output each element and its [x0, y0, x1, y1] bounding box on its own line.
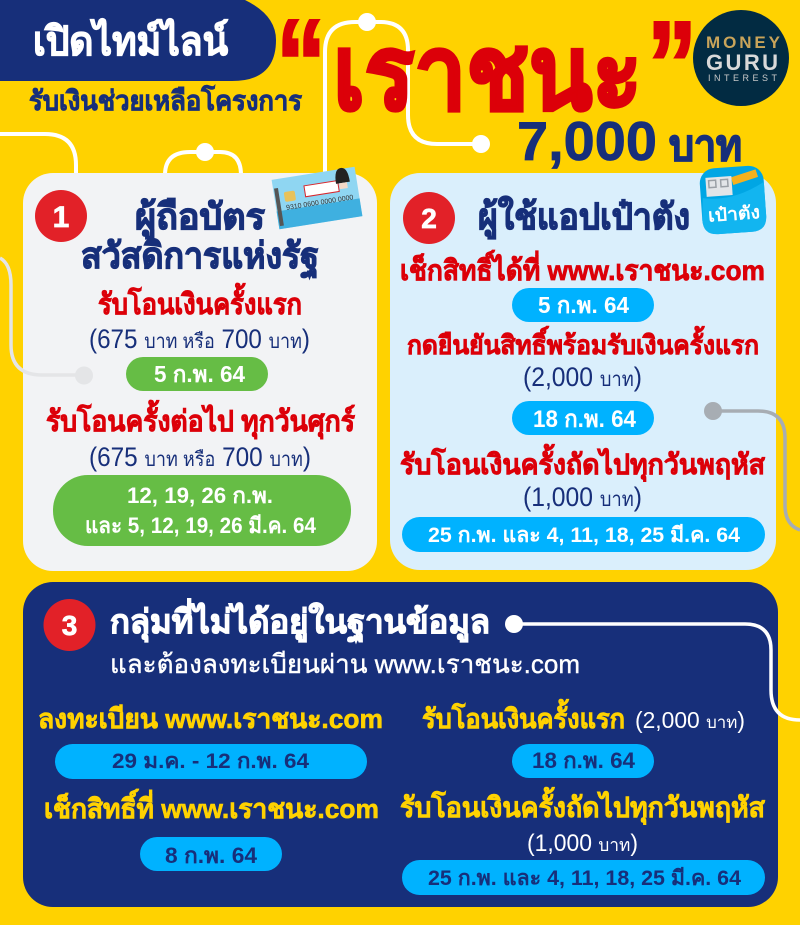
blue pill: check date: 5 ก.พ. 64 [538, 292, 629, 318]
panel: group 1 [23, 173, 377, 571]
main title: เราชนะ [333, 16, 642, 132]
group 1 heading: ผู้ถือบัตร [135, 196, 266, 240]
first transfer heading: (2,000 บาท) [635, 707, 745, 733]
green pill: next dates [53, 475, 351, 546]
next transfer heading: รับโอนเงินครั้งถัดไปทุกวันพฤหัส [400, 786, 766, 825]
group 1 heading: สวัสดิการแห่งรัฐ [81, 235, 319, 279]
blue pill: check date [140, 837, 282, 871]
check eligibility heading: เช็กสิทธิ์ได้ที่ www.เราชนะ.com [400, 250, 765, 286]
green pill: first date: 5 ก.พ. 64 [154, 361, 245, 387]
logo: Money Guru Interest: INTEREST [708, 73, 778, 83]
blue pill: confirm date [512, 401, 654, 435]
next amount: (675 บาท หรือ 700 บาท) [89, 442, 311, 472]
blue pill: next dates: 25 ก.พ. และ 4, 11, 18, 25 มี.ค. 64 [428, 866, 741, 890]
register heading: ลงทะเบียน www.เราชนะ.com [38, 704, 383, 734]
group 3 heading: กลุ่มที่ไม่ได้อยู่ในฐานข้อมูล [110, 598, 490, 643]
connector lines: grey and white in panels [0, 258, 800, 720]
blue pill: confirm date: 18 ก.พ. 64 [533, 406, 637, 433]
first transfer heading: รับโอนเงินครั้งแรก [98, 282, 302, 321]
group 2 heading: ผู้ใช้แอปเป๋าตัง [478, 195, 690, 240]
confirm amount: (2,000 บาท) [523, 362, 642, 392]
blue pill: register dates [55, 744, 367, 779]
blue pill: check date [512, 288, 654, 322]
logo: Money Guru Interest: GURU [706, 50, 778, 75]
green pill: next dates: และ 5, 12, 19, 26 มี.ค. 64 [85, 513, 317, 538]
confirm heading: กดยืนยันสิทธิ์พร้อมรับเงินครั้งแรก [407, 325, 759, 360]
next amount: (1,000 บาท) [527, 830, 638, 857]
icon: welfare card: 9310 0600 0000 0000 [286, 194, 354, 212]
green pill: first date [126, 357, 268, 391]
header pill title: เปิดไทม์ไลน์ [33, 18, 228, 64]
closing quote mark: ” [647, 0, 697, 135]
group 3 subheading: และต้องลงทะเบียนผ่าน www.เราชนะ.com [110, 649, 580, 679]
badge 3 [44, 599, 96, 651]
badge 2: 2 [421, 203, 437, 234]
first amount: (675 บาท หรือ 700 บาท) [89, 324, 310, 354]
next transfer heading: รับโอนครั้งต่อไป ทุกวันศุกร์ [46, 399, 355, 439]
blue pill: register dates: 29 ม.ค. - 12 ก.พ. 64 [112, 750, 309, 773]
blue pill: check date: 8 ก.พ. 64 [165, 843, 258, 868]
check heading: เช็กสิทธิ์ที่ www.เราชนะ.com [44, 789, 379, 824]
icon: Pao Tang app [699, 165, 767, 235]
blue pill: next dates: 25 ก.พ. และ 4, 11, 18, 25 มี.ค. 64 [428, 523, 740, 547]
badge 1: 1 [53, 201, 69, 234]
blue pill: first date: 18 ก.พ. 64 [532, 748, 636, 773]
logo: Money Guru Interest: MONEY [706, 33, 781, 52]
amount [517, 110, 742, 172]
next transfer heading: รับโอนเงินครั้งถัดไปทุกวันพฤหัส [400, 443, 766, 482]
panel: group 3 [23, 582, 778, 907]
badge 1 [35, 190, 87, 242]
blue pill: first date [512, 744, 654, 778]
next amount: (1,000 บาท) [523, 482, 642, 512]
icon: welfare card [271, 166, 362, 229]
icon: Pao Tang app: เป๋าตัง [707, 202, 761, 226]
connector lines: top white [0, 13, 490, 175]
group 1 heading [81, 196, 319, 279]
header pill [0, 0, 276, 81]
blue pill: next dates [402, 517, 765, 552]
badge 3: 3 [62, 610, 77, 641]
panel: group 2 [390, 173, 776, 570]
badge 2 [403, 192, 455, 244]
green pill: next dates: 12, 19, 26 ก.พ. [127, 483, 273, 508]
first transfer heading [422, 698, 745, 734]
blue pill: next dates [402, 860, 765, 895]
subtitle: รับเงินช่วยเหลือโครงการ [29, 84, 302, 116]
amount: บาท [669, 122, 742, 169]
logo: Money Guru Interest [693, 10, 789, 106]
first transfer heading: รับโอนเงินครั้งแรก [422, 698, 625, 734]
amount: 7,000 [517, 110, 657, 172]
